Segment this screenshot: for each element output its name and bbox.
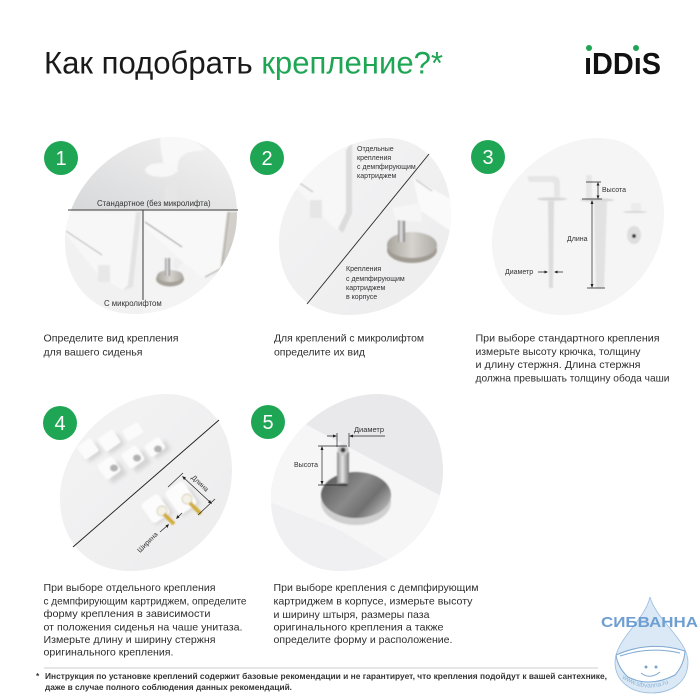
text: step 4: оригинального крепления. — [44, 646, 174, 658]
text: step 4: от положения сиденья на чаше унитаза. — [44, 622, 243, 634]
dimension lines — [538, 182, 605, 288]
text: step 3: должна превышать толщину обода чаши — [476, 372, 670, 384]
text: step 3: При выборе стандартного крепления — [476, 332, 660, 344]
text: step 1: Определите вид крепления — [44, 332, 178, 344]
label: built-in cartridge: с демпфирующим — [346, 276, 405, 283]
badge 5: 5 — [262, 412, 274, 434]
label: built-in cartridge: Крепления — [346, 266, 381, 273]
photo: cartridge clips — [60, 394, 232, 571]
photo: hinge types — [65, 137, 237, 314]
label: separate cartridge: крепления — [357, 155, 391, 162]
badge 2: 2 — [261, 148, 273, 170]
photo: metal mount — [271, 394, 443, 571]
divider lines — [68, 210, 238, 300]
panel: step 1 — [65, 137, 238, 314]
label: separate cartridge: с демпфирующим — [357, 164, 416, 171]
dimension lines — [160, 473, 215, 532]
label: length: Длина — [567, 236, 588, 243]
badge 5 — [251, 405, 285, 439]
footnote: даже в случае полного соблюдения данных рекомендаций. — [45, 682, 292, 692]
text: step 5: картриджем в корпусе, измерьте высоту — [274, 596, 473, 608]
dimension lines — [318, 433, 385, 485]
panel: step 3 — [492, 138, 664, 315]
label: width: Ширина — [136, 531, 160, 554]
label: standard: Стандартное (без микролифта) — [97, 199, 211, 208]
panel: step 5 — [271, 394, 443, 571]
text: step 4: с демпфирующим картриджем, определите — [44, 596, 247, 608]
label: diameter: Диаметр — [354, 427, 384, 434]
text: step 3: и длину стержня. Длина стержня — [476, 359, 640, 371]
photo: standard bolts — [492, 138, 664, 315]
icon: bathtub — [616, 646, 685, 682]
label: diameter: Диаметр — [505, 269, 533, 276]
text: step 5: и ширину штыря, размеры паза — [274, 609, 430, 621]
text: step 2: Для креплений с микролифтом — [274, 332, 424, 344]
diagonal divider — [307, 154, 429, 304]
text: step 1: для вашего сиденья — [44, 346, 142, 358]
label: soft close: С микролифтом — [104, 299, 162, 308]
label: built-in cartridge: картриджем — [346, 285, 386, 292]
label: built-in cartridge: в корпусе — [346, 294, 377, 301]
badge 1 — [44, 141, 78, 175]
label: length: Длина — [190, 474, 209, 494]
footnote: Инструкция по установке креплений содержит базовые рекомендации и не гарантирует, что крепления подойдут к вашей сантехнике, — [45, 671, 607, 681]
footnote: * — [36, 671, 40, 681]
badge 4 — [43, 406, 77, 440]
text: step 3: измерьте высоту крючка, толщину — [476, 346, 641, 358]
panel: step 4 — [60, 394, 232, 571]
title: Как подобрать крепление?* — [44, 46, 443, 80]
wordmark: СИБВАННА — [601, 614, 698, 631]
badge 3: 3 — [482, 147, 494, 169]
logo: iddis: ıDDıS — [584, 46, 661, 81]
icon: water drop — [615, 597, 688, 693]
label: height: Высота — [602, 187, 626, 194]
badge 2 — [250, 141, 284, 175]
label: height: Высота — [294, 462, 318, 469]
text: step 4: Измерьте длину и ширину стержня — [44, 634, 215, 646]
url: www.sibvanna.ru — [622, 675, 668, 688]
text: step 4: форму крепления в зависимости — [44, 608, 211, 620]
label: separate cartridge: Отдельные — [357, 146, 394, 153]
diagonal divider — [73, 420, 219, 547]
label: separate cartridge: картриджем — [357, 173, 397, 180]
text: step 2: определите их вид — [274, 346, 365, 358]
photo: cartridge types — [279, 138, 450, 315]
text: step 5: При выборе крепления с демпфирующим — [274, 582, 478, 594]
panel: step 2 — [279, 138, 450, 315]
badge 1: 1 — [55, 148, 67, 170]
badge 3 — [471, 140, 505, 174]
text: step 4: При выборе отдельного крепления — [44, 582, 216, 594]
watermark: sibvanna — [601, 596, 698, 694]
text: step 5: определите форму и расположение. — [274, 634, 452, 646]
text: step 5: оригинального крепления а также — [274, 622, 444, 634]
badge 4: 4 — [54, 413, 66, 435]
